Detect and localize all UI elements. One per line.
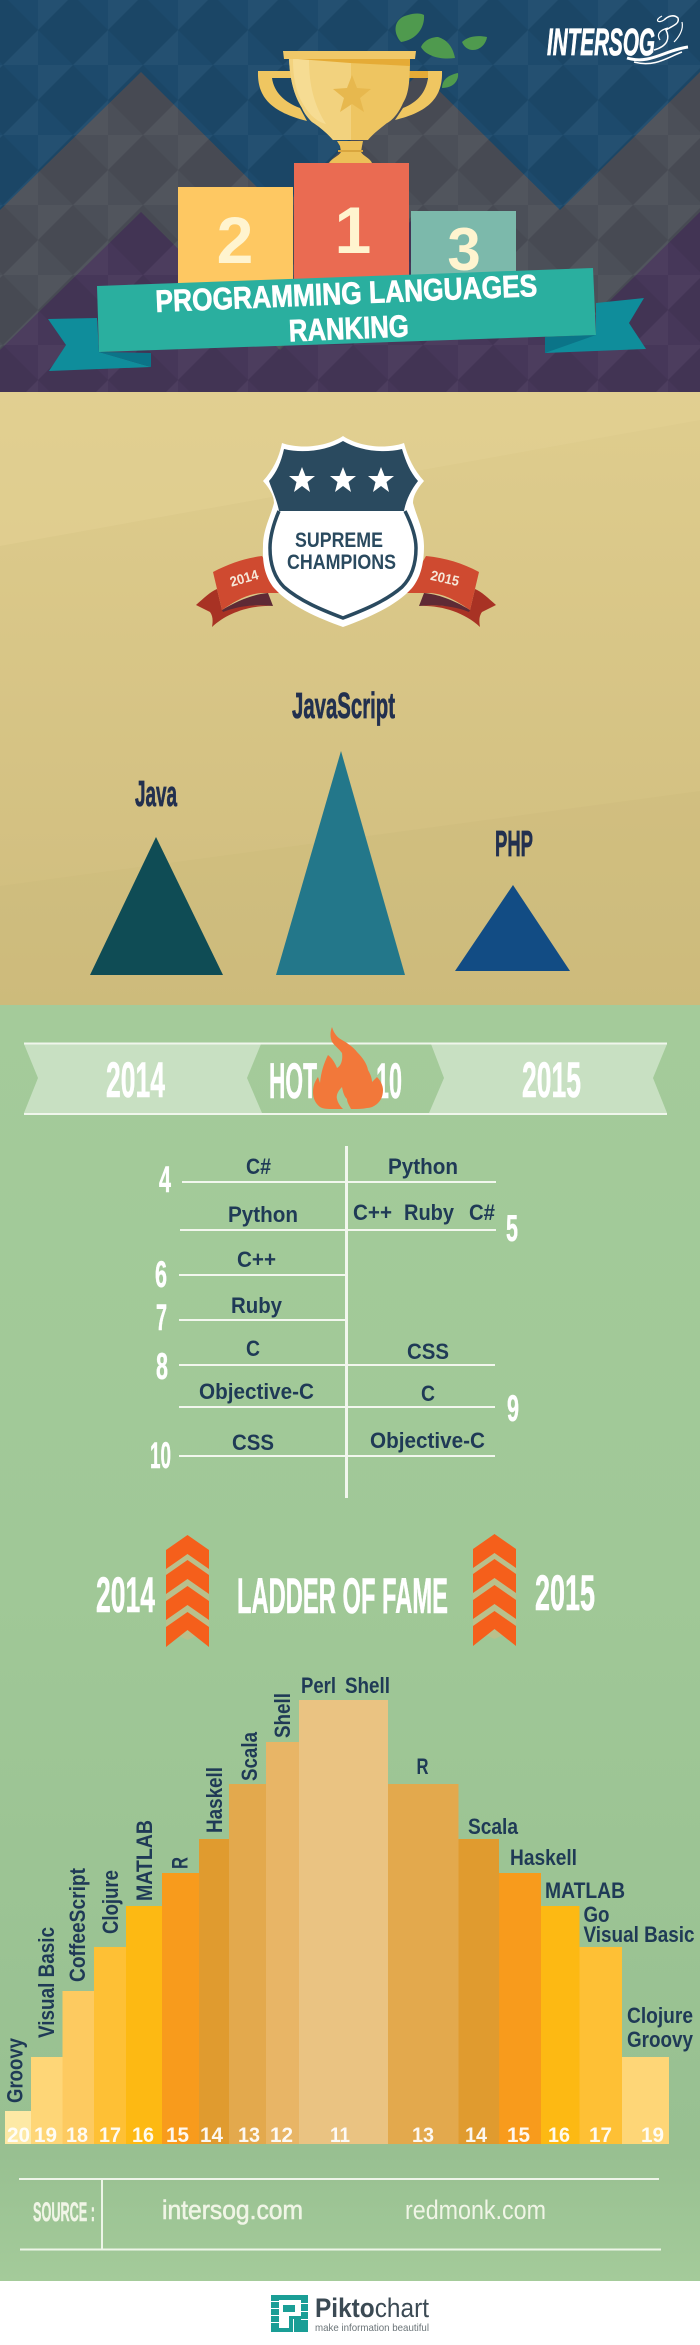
icon: ribbon left <box>196 556 285 627</box>
bar values: 18 <box>66 2124 88 2147</box>
icon: ribbon left: 2014 <box>228 566 260 590</box>
2015 horizontal labels: MATLAB <box>545 1878 625 1903</box>
rank numbers: 6 <box>155 1254 167 1295</box>
pedestal: third place <box>411 211 516 283</box>
rank numbers: 4 <box>159 1159 171 1200</box>
2015 horizontal labels: Scala <box>468 1814 519 1839</box>
language labels: Python <box>388 1154 458 1179</box>
rank numbers: 5 <box>506 1208 518 1249</box>
text: supreme champions: CHAMPIONS <box>287 551 396 574</box>
panel: footer <box>0 2281 700 2345</box>
bar values: 17 <box>99 2124 121 2147</box>
language labels: CSS <box>232 1430 274 1455</box>
2015 horizontal labels: Shell <box>345 1673 390 1698</box>
icon: stars <box>289 467 394 492</box>
bar values: 13 <box>238 2124 260 2147</box>
chart: hot 10 ranking lines <box>150 1146 519 1498</box>
bar values: 15 <box>166 2124 189 2147</box>
2015 horizontal labels: Perl <box>301 1673 336 1698</box>
panel: supreme champions <box>0 392 700 1005</box>
bar values: 17 <box>589 2124 612 2147</box>
bar values: 11 <box>330 2124 350 2147</box>
panel: source <box>19 2178 661 2250</box>
panel: hot 10 banner: 10 <box>376 1053 402 1109</box>
chart: ladder bars <box>2 1673 694 2147</box>
title: PROGRAMMING LANGUAGES <box>155 268 538 319</box>
panel: source: SOURCE : <box>33 2197 95 2227</box>
language labels: CSS <box>407 1339 449 1364</box>
text: supreme champions <box>287 529 396 574</box>
bar values: 16 <box>132 2124 154 2147</box>
language labels: C++ <box>353 1200 392 1225</box>
bar values: 15 <box>507 2124 530 2147</box>
2014 rotated labels: Clojure <box>98 1870 123 1934</box>
language labels: Python <box>228 1202 298 1227</box>
bar values: 16 <box>548 2124 570 2147</box>
panel: hot 10 banner <box>24 1027 667 1115</box>
language labels: C++ <box>237 1247 276 1272</box>
icon: leaves <box>396 14 487 88</box>
heading: ladder of fame <box>96 1534 595 1647</box>
icon: shield badge <box>263 436 424 627</box>
triangle: JavaScript <box>276 685 405 975</box>
2015 horizontal labels: Haskell <box>510 1845 577 1870</box>
icon: ribbon right <box>405 556 496 627</box>
pedestal: second place: 2 <box>217 203 253 277</box>
bar values: 19 <box>641 2124 664 2147</box>
panel: source: intersog.com <box>162 2195 303 2225</box>
panel: source: redmonk.com <box>405 2195 546 2225</box>
panel: green background <box>0 1005 700 2281</box>
bar values: 20 <box>7 2124 30 2147</box>
2014 rotated labels: Haskell <box>202 1767 227 1833</box>
language labels <box>199 1154 495 1455</box>
language labels: C# <box>246 1154 271 1179</box>
icon: chevrons left <box>166 1535 209 1647</box>
language labels: Ruby <box>404 1200 455 1225</box>
2014 rotated labels <box>2 1693 295 2103</box>
2014 rotated labels: MATLAB <box>132 1820 157 1901</box>
language labels: Ruby <box>231 1293 283 1318</box>
2014 rotated labels: Scala <box>237 1731 262 1781</box>
icon: trophy <box>258 51 442 163</box>
pedestal: second place <box>178 187 293 285</box>
2015 horizontal labels <box>301 1673 694 2052</box>
triangle: PHP <box>455 823 570 971</box>
pedestal: first place: 1 <box>335 193 371 267</box>
rank numbers: 7 <box>156 1297 167 1338</box>
bar values: 19 <box>34 2124 57 2147</box>
text: Piktochart wordmark: Piktochart <box>315 2293 429 2323</box>
triangle: PHP: PHP <box>495 823 533 864</box>
language labels: Objective-C <box>199 1379 314 1404</box>
language labels: C <box>421 1381 435 1406</box>
pedestal: first place <box>294 163 409 283</box>
bar values: 14 <box>200 2124 223 2147</box>
2014 rotated labels: CoffeeScript <box>65 1867 90 1982</box>
triangle: Java <box>90 773 223 975</box>
2015 horizontal labels: Go <box>584 1902 610 1927</box>
panel: hot 10 banner: HOT <box>269 1053 317 1109</box>
title <box>155 268 539 354</box>
panel: hot 10 banner: 2014 <box>106 1052 165 1108</box>
language labels: Objective-C <box>370 1428 485 1453</box>
bar values: 14 <box>465 2124 487 2147</box>
rank numbers: 8 <box>156 1346 168 1387</box>
title: RANKING <box>288 308 409 348</box>
2014 rotated labels: Shell <box>270 1693 295 1738</box>
text: supreme champions: SUPREME <box>295 529 383 552</box>
icon: flame <box>313 1027 383 1109</box>
bar values: 13 <box>412 2124 434 2147</box>
language labels: C <box>246 1336 260 1361</box>
banner: title ribbon <box>48 268 646 371</box>
2015 horizontal labels: R <box>416 1754 429 1779</box>
bar values <box>7 2124 664 2147</box>
rank numbers: 9 <box>507 1388 519 1429</box>
heading: ladder of fame: 2015 <box>535 1565 595 1621</box>
2014 rotated labels: R <box>168 1857 192 1869</box>
triangle: Java: Java <box>135 773 178 814</box>
panel: header <box>0 0 700 392</box>
rank numbers: 10 <box>150 1435 171 1476</box>
heading: ladder of fame: LADDER OF FAME <box>237 1568 448 1624</box>
triangle: JavaScript: JavaScript <box>292 685 395 726</box>
icon: Piktochart logo <box>271 2295 308 2332</box>
panel: hot 10 banner: 2015 <box>522 1052 581 1108</box>
text: Piktochart wordmark: make information beautiful <box>315 2322 429 2334</box>
heading: ladder of fame: 2014 <box>96 1567 155 1623</box>
2014 rotated labels: Visual Basic <box>34 1927 59 2038</box>
language labels: C# <box>469 1200 495 1225</box>
rank numbers <box>150 1159 519 1476</box>
pedestal: third place: 3 <box>447 216 481 283</box>
bar values: 12 <box>270 2124 293 2147</box>
icon: ribbon right: 2015 <box>429 567 461 589</box>
icon: chevrons right <box>473 1534 516 1646</box>
2014 rotated labels: Groovy <box>2 2037 28 2103</box>
